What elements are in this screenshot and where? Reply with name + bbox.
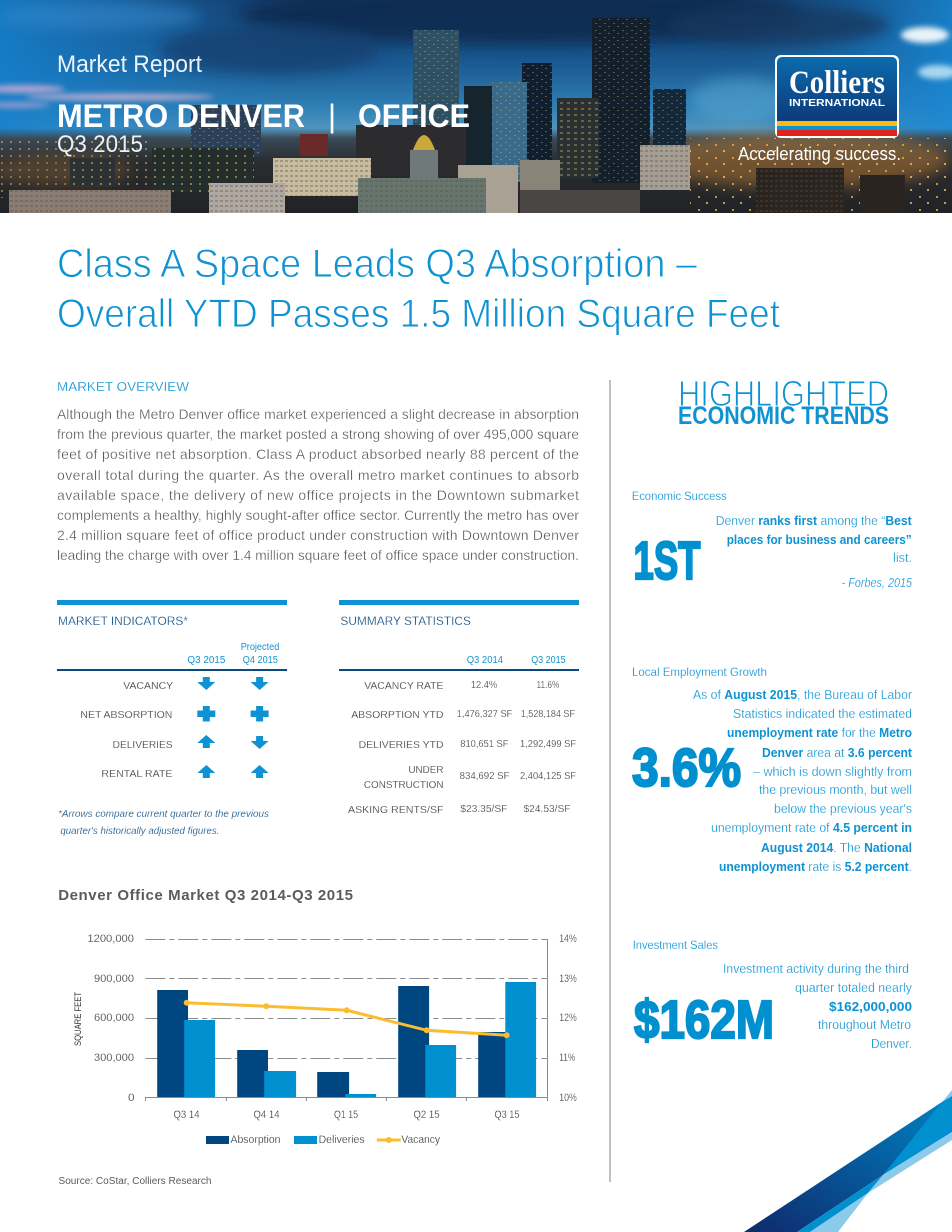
description: throughout Metro <box>818 1017 911 1032</box>
row: vacancy: VACANCY <box>123 680 173 692</box>
label: Investment Sales <box>633 938 718 952</box>
market indicators heading: MARKET INDICATORS* <box>58 614 188 628</box>
Colliers International logo: INTERNATIONAL <box>789 98 885 109</box>
skyline towers <box>191 18 686 183</box>
row: vacancy rate <box>364 680 559 692</box>
market overview text block: available space, the delivery of new office projects in the Downtown submarket <box>57 487 579 503</box>
main title: Overall YTD Passes 1.5 Million Square Feet <box>57 292 780 336</box>
column headers: Projected <box>241 642 279 653</box>
legend: Absorption <box>230 1134 280 1146</box>
panel: investment sales <box>633 938 912 1051</box>
summary statistics heading: SUMMARY STATISTICS <box>340 614 471 628</box>
footnote: quarter's historically adjusted figures. <box>60 826 219 837</box>
combo chart: absorption, deliveries, vacancy <box>73 933 577 1146</box>
x axis labels <box>174 1109 520 1121</box>
row: vacancy rate: 11.6% <box>536 680 559 691</box>
row: under construction: CONSTRUCTION <box>364 779 444 791</box>
row: absorption ytd: 1,476,327 SF <box>457 709 512 720</box>
description: Denver ranks first among the “Best <box>716 513 912 528</box>
row: deliveries ytd: 810,651 SF <box>460 739 508 750</box>
Colliers International logo: Colliers <box>789 65 885 101</box>
column headers: Q3 2015 <box>187 655 226 666</box>
row: asking rents: ASKING RENTS/SF <box>348 804 444 816</box>
description: unemployment rate for the Metro <box>727 725 912 740</box>
tagline: Accelerating success. <box>738 144 901 164</box>
left axis labels: 900,000 <box>94 973 134 985</box>
description: quarter totaled nearly <box>795 980 912 995</box>
right axis labels: 14% <box>559 933 577 945</box>
right axis labels <box>559 933 577 1104</box>
decorative corner ribbon <box>744 1090 952 1232</box>
column headers <box>187 642 279 666</box>
legend: Deliveries <box>319 1134 365 1146</box>
column headers: Q3 2015 <box>531 655 566 666</box>
vacancy line <box>184 1000 509 1038</box>
right axis labels: 11% <box>559 1052 575 1064</box>
x axis labels: Q1 15 <box>334 1109 358 1121</box>
row: under construction: 2,404,125 SF <box>520 771 576 782</box>
description: - Forbes, 2015 <box>842 575 913 590</box>
header banner: Denver skyline photo <box>0 0 952 213</box>
market overview text block: leading the charge with over 1.4 million square feet of office space under construction. <box>57 547 579 563</box>
description: $162,000,000 <box>829 999 912 1014</box>
header text: metro denver office: | <box>328 98 336 134</box>
column headers: Q4 2015 <box>243 655 278 666</box>
column headers <box>467 655 566 666</box>
row: under construction <box>364 764 576 791</box>
description <box>693 687 913 874</box>
market overview text block: complements a healthy, highly sought-after office sector. Currently the metro has over <box>57 507 579 523</box>
row: deliveries ytd: DELIVERIES YTD <box>359 739 444 751</box>
description: As of August 2015, the Bureau of Labor <box>693 687 913 702</box>
panel: market indicators <box>57 600 287 837</box>
x axis labels: Q3 15 <box>494 1109 520 1121</box>
big stat: $162M: $162M <box>634 990 774 1050</box>
market overview text block <box>57 406 579 563</box>
description: – which is down slightly from <box>753 764 912 779</box>
left axis labels: 0 <box>128 1092 134 1104</box>
panel: summary statistics <box>339 600 579 816</box>
row: deliveries ytd <box>359 739 576 751</box>
row: absorption ytd <box>351 709 575 721</box>
label: Economic Success <box>632 489 727 503</box>
gridlines and axes <box>145 939 548 1101</box>
row: under construction: 834,692 SF <box>460 771 510 782</box>
distant city band <box>0 128 952 213</box>
market overview text block: Although the Metro Denver office market experienced a slight decrease in absorption <box>57 406 579 422</box>
footnote <box>58 809 269 837</box>
row: absorption ytd: 1,528,184 SF <box>521 709 575 720</box>
deliveries bars <box>184 982 536 1097</box>
row: deliveries ytd: 1,292,499 SF <box>520 739 576 750</box>
description: unemployment rate is 5.2 percent. <box>719 859 912 874</box>
description: list. <box>893 550 912 565</box>
chart title: Denver Office Market Q3 2014-Q3 2015 <box>58 887 353 904</box>
header text: quarter: Q3 2015 <box>57 131 143 158</box>
market overview text block: from the previous quarter, the market posted a strong showing of over 495,000 square <box>57 426 579 442</box>
row: under construction: UNDER <box>408 764 444 776</box>
row: net absorption <box>80 706 269 722</box>
right axis labels: 12% <box>559 1012 577 1024</box>
header text: metro denver office <box>57 98 470 134</box>
right axis labels: 10% <box>559 1092 577 1104</box>
big stat: 1st: 1ST <box>634 531 701 591</box>
row: rental rate <box>101 765 269 780</box>
highlighted economic trends heading: ECONOMIC TRENDS <box>678 402 889 430</box>
right axis labels: 13% <box>559 973 577 985</box>
lower city blocks <box>9 134 905 213</box>
x axis labels: Q4 14 <box>254 1109 280 1121</box>
left axis labels: 1200,000 <box>87 933 134 945</box>
description: below the previous year's <box>774 801 912 816</box>
description: Denver. <box>871 1036 912 1051</box>
row: deliveries <box>113 735 269 751</box>
left axis title: SQUARE FEET <box>73 992 83 1046</box>
x axis labels: Q3 14 <box>174 1109 200 1121</box>
panel: economic success <box>632 489 913 591</box>
row: asking rents <box>348 804 570 816</box>
left axis labels: 300,000 <box>94 1052 134 1064</box>
market overview text block: feet of positive net absorption. Class A product absorbed nearly 88 percent of the <box>57 446 579 462</box>
description <box>716 513 913 590</box>
row: rental rate: RENTAL RATE <box>101 768 172 780</box>
column headers: Q3 2014 <box>467 655 503 666</box>
header text: market report: Market Report <box>57 51 202 78</box>
big stat: 3.6%: 3.6% <box>632 738 741 798</box>
row: vacancy <box>123 677 269 692</box>
legend: Vacancy <box>401 1134 440 1146</box>
main title: Class A Space Leads Q3 Absorption – <box>57 242 698 286</box>
highlighted economic trends heading: HIGHLIGHTED <box>678 373 889 414</box>
market overview heading: MARKET OVERVIEW <box>57 379 190 394</box>
row: asking rents: $23.35/SF <box>460 804 507 815</box>
row: net absorption: NET ABSORPTION <box>80 709 172 721</box>
description: unemployment rate of 4.5 percent in <box>711 820 912 835</box>
source note: Source: CoStar, Colliers Research <box>58 1176 212 1187</box>
description: places for business and careers” <box>727 532 912 547</box>
description <box>723 961 912 1051</box>
highlighted economic trends heading <box>678 373 889 430</box>
description: the previous month, but well <box>759 782 912 797</box>
header text: metro denver office: OFFICE <box>358 98 470 134</box>
row: deliveries: DELIVERIES <box>113 739 173 751</box>
x axis labels: Q2 15 <box>414 1109 440 1121</box>
row: vacancy rate: 12.4% <box>471 680 497 691</box>
left axis labels: 600,000 <box>94 1012 134 1024</box>
legend <box>206 1134 440 1146</box>
footnote: *Arrows compare current quarter to the previous <box>58 809 269 820</box>
left axis labels <box>87 933 134 1104</box>
sky <box>0 0 952 213</box>
Colliers International logo <box>775 55 899 138</box>
absorption bars <box>157 986 506 1097</box>
description: Statistics indicated the estimated <box>733 706 912 721</box>
description: August 2014. The National <box>761 840 912 855</box>
row: asking rents: $24.53/SF <box>524 804 570 815</box>
main title <box>57 242 780 336</box>
row: absorption ytd: ABSORPTION YTD <box>351 709 444 721</box>
label: Local Employment Growth <box>632 665 767 679</box>
description: Investment activity during the third <box>723 961 909 976</box>
panel: local employment growth <box>632 665 913 874</box>
market overview text block: overall total during the quarter. As the overall metro market continues to absorb <box>57 467 579 483</box>
market overview text block: 2.4 million square feet of office product under construction with Downtown Denver <box>57 527 579 543</box>
description: Denver area at 3.6 percent <box>762 745 913 760</box>
header text: metro denver office: METRO DENVER <box>57 98 305 134</box>
row: vacancy rate: VACANCY RATE <box>364 680 444 692</box>
